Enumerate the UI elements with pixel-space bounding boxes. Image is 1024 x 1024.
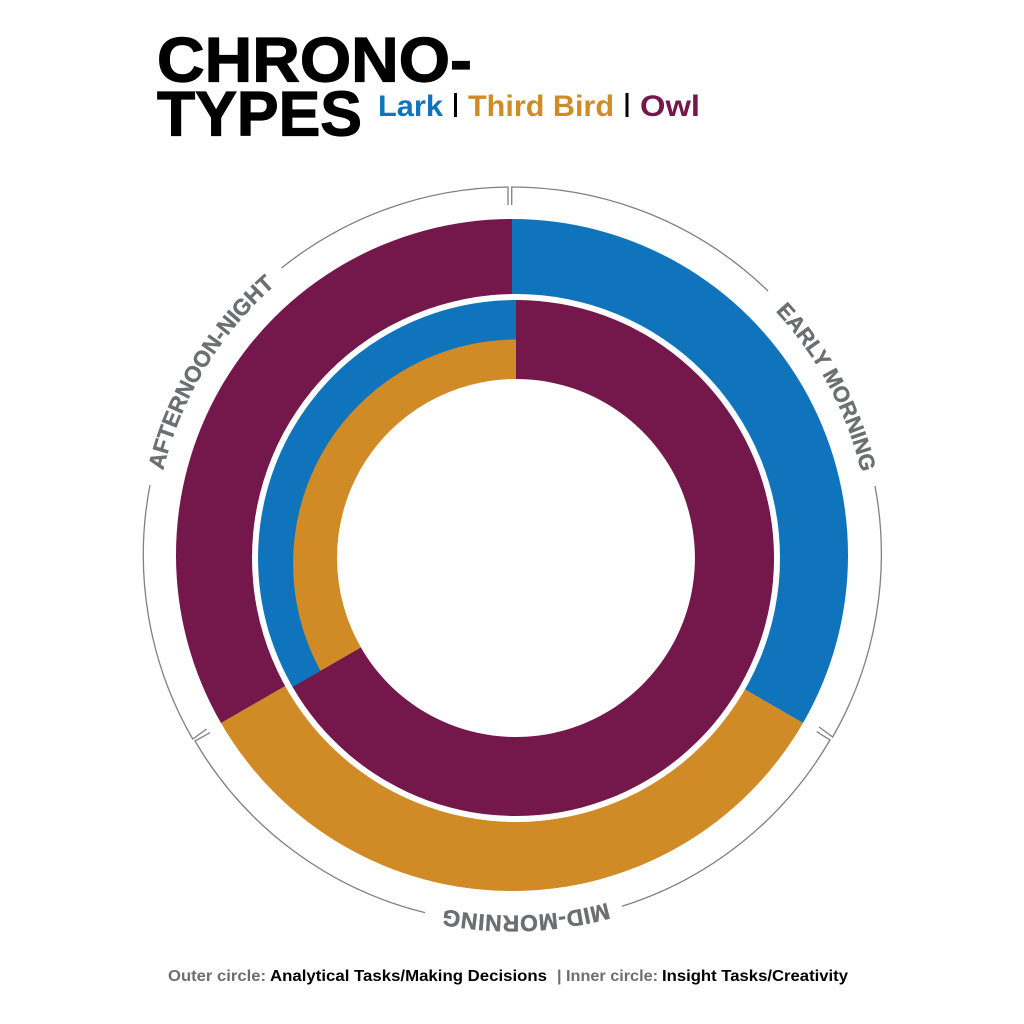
inner segment: owl [293,300,774,816]
outer segment: afternoon-night owl [176,219,512,723]
outer segment: mid-morning third bird [221,675,803,891]
inner ring chart [252,294,780,822]
legend: third bird: Third Bird [468,90,614,123]
label: mid-morning: MID-MORNING [443,903,610,932]
label: early morning: EARLY MORNING [776,302,875,471]
title [157,26,472,150]
legend [378,90,700,123]
outer ring chart [176,219,848,891]
inner segment: lark [258,300,517,689]
footer note: Outer circle: [168,968,266,985]
legend: lark: Lark [378,90,443,123]
footer note [168,968,848,985]
outer segment: early morning lark [512,219,848,723]
footer note: | Inner circle: [557,968,658,985]
footer note: Insight Tasks/Creativity [662,968,848,985]
footer note: Analytical Tasks/Making Decisions [270,968,547,985]
title: TYPES [157,80,362,150]
title: CHRONO- [157,26,472,96]
time-of-day bracket lines [143,187,881,913]
legend: owl: Owl [640,90,700,123]
inner segment: third bird [293,340,517,672]
label: afternoon-night: AFTERNOON-NIGHT [149,274,272,470]
